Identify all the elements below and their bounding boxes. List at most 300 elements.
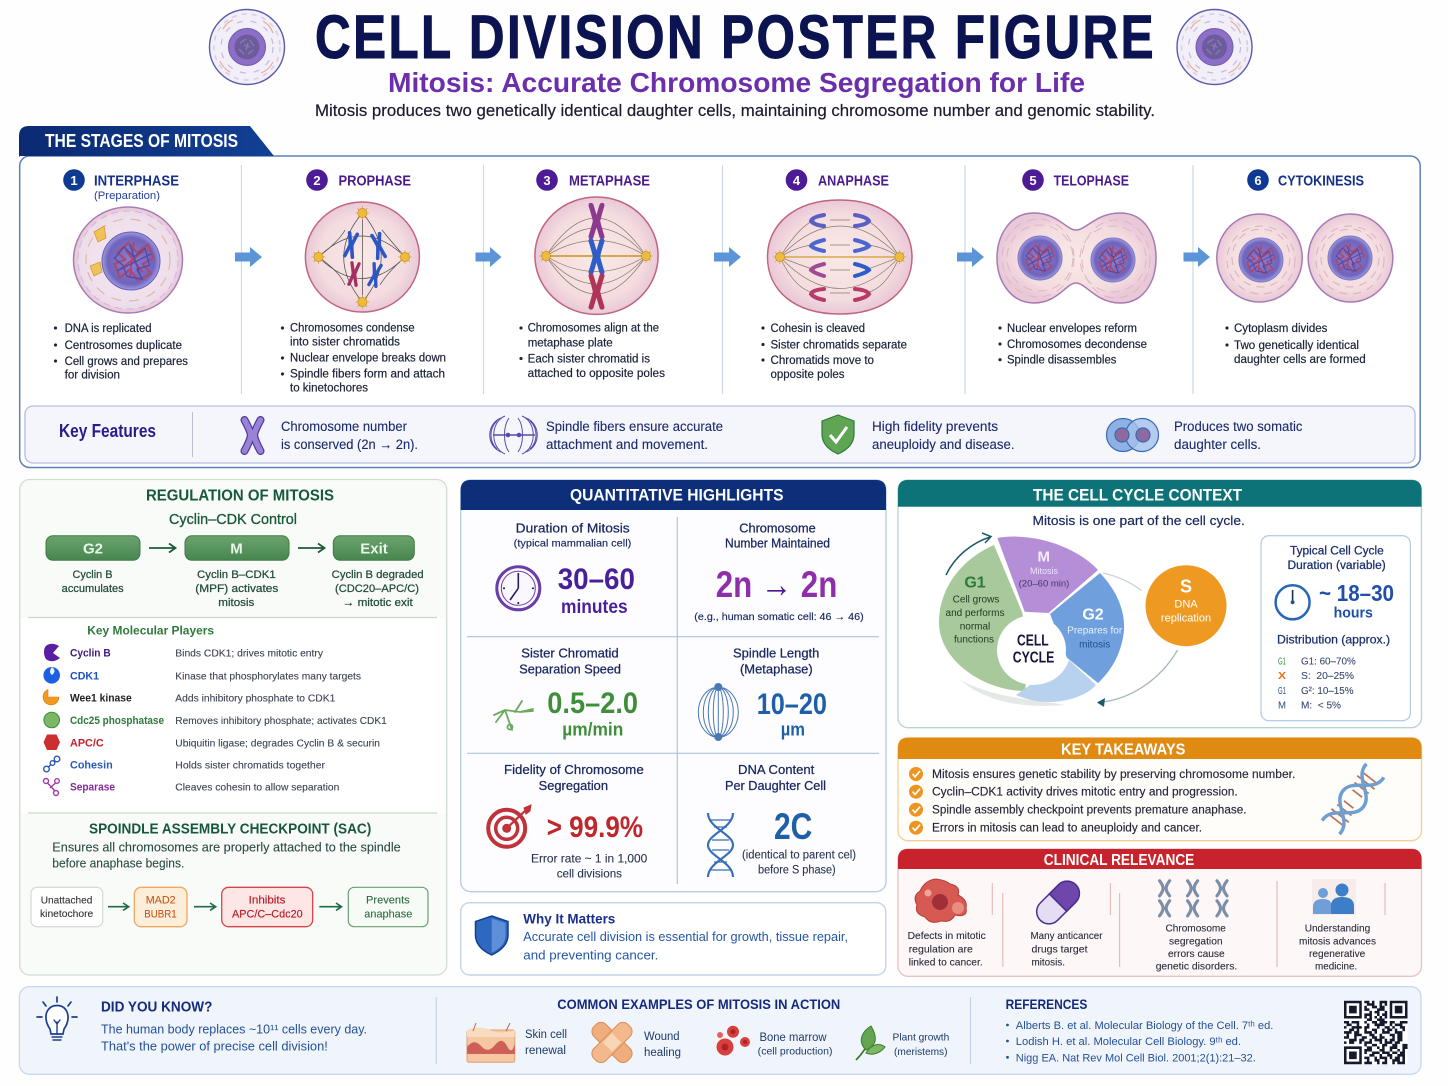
stat: spindle length: 10–20	[757, 688, 827, 721]
clinical item: cancer cell: linked to cancer.	[909, 956, 983, 968]
icon: Cyclin B	[44, 644, 60, 661]
bullet list: Centrosomes duplicate	[65, 340, 182, 352]
player descriptions: Adds inhibitory phosphate to CDK1	[175, 693, 335, 705]
bullet list: Chromosomes condense	[290, 323, 415, 335]
arrow: 3 to 4	[714, 247, 741, 267]
duration box: ~ 18–30	[1319, 580, 1394, 606]
example: plant growth: (meristems)	[894, 1046, 948, 1058]
key molecular players heading: Key Molecular Players	[87, 625, 214, 637]
takeaway text: Errors in mitosis can lead to aneuploidy and cancer.	[932, 823, 1202, 835]
wedge: G2: G2	[1082, 607, 1104, 624]
stat: duration of mitosis: 30–60	[558, 563, 635, 596]
wedge: M	[997, 537, 1098, 613]
number badge 1: 1	[70, 173, 78, 188]
illustration: prophase cell	[305, 202, 419, 312]
stat: DNA content per daughter cell: 2C	[774, 806, 812, 847]
bullet list: DNA is replicated	[65, 323, 152, 335]
section tab	[19, 126, 274, 157]
panel: quantitative highlights	[461, 480, 886, 892]
player descriptions	[175, 648, 387, 794]
icon: Cdc25 phosphatase	[44, 712, 60, 728]
panel: the stages of mitosis	[19, 126, 1420, 468]
clinical item: chromosomes: genetic disorders.	[1156, 961, 1237, 973]
arrow: G2 to M	[149, 544, 176, 552]
molecular players table	[43, 644, 387, 796]
clinical item: people: medicine.	[1315, 961, 1357, 973]
SAC box: MAD2 BUBR1: BUBR1	[144, 908, 177, 920]
did you know text: That's the power of precise cell division!	[101, 1039, 328, 1054]
feature text 4: daughter cells.	[1174, 437, 1261, 452]
flow: Exit pill	[333, 536, 414, 560]
SAC box: unattached kinetochore: Unattached	[41, 894, 93, 906]
duration box	[1261, 536, 1410, 721]
stat: duration of mitosis: (typical mammalian cell)	[514, 538, 631, 550]
header band	[461, 480, 886, 510]
bullet list: Two genetically identical	[1234, 340, 1359, 352]
bullet list	[54, 323, 188, 382]
duration box: hours	[1334, 605, 1373, 622]
stage 2: prophase	[281, 169, 446, 395]
SAC box: inhibits APC/C-Cdc20	[222, 887, 313, 927]
SAC heading: SPOINDLE ASSEMBLY CHECKPOINT (SAC)	[89, 821, 371, 837]
wedge: G1: and performs	[946, 608, 1004, 619]
bullet list: Each sister chromatid is	[528, 353, 650, 365]
player names: Cyclin B	[70, 648, 111, 660]
header band	[898, 480, 1422, 507]
references list: Lodish H. et al. Molecular Cell Biology. 9ᵗʰ ed.	[1016, 1036, 1241, 1048]
icon: DNA helix	[708, 813, 733, 877]
flow captions: → mitotic exit	[343, 597, 413, 609]
player names	[70, 648, 164, 794]
clinical item: capsule: mitosis.	[1032, 956, 1065, 968]
stage 1: interphase	[54, 169, 188, 382]
stat: DNA content per daughter cell: Per Daughter Cell	[725, 779, 826, 793]
footer panel	[19, 987, 1421, 1074]
clinical item: chromosomes: segregation	[1169, 935, 1223, 947]
illustration: metaphase cell	[535, 197, 658, 314]
number badge 3: 3	[543, 173, 551, 188]
distribution list: G1	[1278, 686, 1286, 697]
S phase circle: replication	[1161, 613, 1211, 625]
wedge: G1	[939, 545, 1030, 691]
flow captions: accumulates	[62, 583, 124, 595]
arrow: cycle top	[946, 533, 991, 575]
bullet list: Nuclear envelopes reform	[1007, 323, 1137, 335]
icon: Separase	[44, 778, 59, 796]
bullet list: Spindle fibers form and attach	[290, 369, 445, 381]
clinical item: capsule: drugs target	[1032, 943, 1088, 955]
subtitle: Mitosis: Accurate Chromosome Segregation for Life	[388, 67, 1085, 98]
stat: fidelity of chromosome segregation: cell divisions	[557, 867, 622, 881]
examples heading: COMMON EXAMPLES OF MITOSIS IN ACTION	[557, 996, 840, 1012]
bullet list: into sister chromatids	[290, 337, 400, 349]
bullet list: metaphase plate	[528, 337, 613, 349]
did you know text	[101, 1021, 367, 1054]
stat: duration of mitosis	[497, 520, 635, 618]
bullet list: Sister chromatids separate	[770, 339, 907, 351]
example: plant growth	[856, 1026, 949, 1060]
cell cycle wheel	[939, 537, 1124, 706]
stat: sister chromatid separation speed: Separation Speed	[519, 663, 621, 677]
number badge 5: 5	[1029, 173, 1037, 188]
stat: fidelity of chromosome segregation	[488, 763, 648, 881]
heading: THE CELL CYCLE CONTEXT	[1033, 487, 1242, 505]
distribution list: S: 20–25%	[1301, 671, 1354, 682]
distribution list: G1: 60–70%	[1301, 656, 1356, 668]
icon: spindle	[490, 416, 537, 454]
stat: spindle length	[698, 647, 827, 740]
section heading: THE STAGES OF MITOSIS	[45, 131, 238, 151]
flow: M pill	[185, 536, 289, 560]
stage name: TELOPHASE	[1054, 172, 1129, 190]
takeaway text: Mitosis ensures genetic stability by preserving chromosome number.	[932, 769, 1295, 781]
references heading: REFERENCES	[1006, 996, 1087, 1012]
references list	[1006, 1020, 1273, 1064]
stat: spindle length: µm	[781, 720, 805, 740]
stage 4: anaphase	[762, 169, 912, 381]
flow: M pill: M	[230, 540, 243, 558]
distribution list	[1278, 656, 1356, 712]
bullet list: Cytoplasm divides	[1234, 323, 1328, 335]
callout text: and preventing cancer.	[523, 947, 658, 962]
stage note: (Preparation)	[94, 190, 160, 202]
stat: fidelity of chromosome segregation: Segregation	[539, 779, 608, 793]
stat: spindle length: Spindle Length	[733, 647, 819, 661]
header band	[898, 738, 1422, 759]
SAC description: Ensures all chromosomes are properly attached to the spindle	[52, 840, 401, 855]
icon: two daughter cells	[1106, 418, 1158, 452]
player descriptions: Kinase that phosphorylates many targets	[175, 670, 361, 682]
illustration: two daughter cells	[1217, 214, 1393, 302]
distribution list: G1	[1278, 656, 1286, 668]
example: wound healing: healing	[644, 1047, 681, 1059]
icon: blue shield	[476, 916, 508, 955]
clinical item: cancer cell	[908, 879, 986, 968]
clinical item: people: mitosis advances	[1299, 935, 1376, 947]
intro sentence: Mitosis produces two genetically identical daughter cells, maintaining chromosome number and genomic stability.	[315, 101, 1155, 120]
number badge 6: 6	[1254, 173, 1262, 188]
arrow: M to S	[1103, 573, 1142, 590]
bullet list: to kinetochores	[290, 383, 368, 395]
stat: fidelity of chromosome segregation: Error rate ~ 1 in 1,000	[531, 851, 648, 865]
illustration: anaphase cell	[768, 200, 912, 314]
stage name: INTERPHASE	[94, 172, 179, 190]
stat: DNA content per daughter cell: (identical to parent cel)	[742, 849, 856, 861]
heading: KEY TAKEAWAYS	[1061, 741, 1185, 758]
takeaway checks	[909, 767, 923, 835]
wedge: G2	[1050, 573, 1124, 683]
arrow: M to Exit	[298, 544, 324, 552]
S phase circle: DNA	[1174, 598, 1198, 610]
panel: regulation of mitosis	[20, 480, 447, 975]
example: skin cell renewal	[467, 1023, 567, 1062]
bullet list	[1226, 323, 1366, 366]
hub: CYCLE	[1013, 649, 1054, 666]
stat: sister chromatid separation speed: µm/min	[562, 720, 623, 740]
number badge 4	[786, 169, 807, 191]
clinical item: cancer cell: regulation are	[909, 943, 973, 955]
feature text 1: is conserved (2n → 2n).	[281, 437, 418, 452]
icon: Wee1 kinase	[43, 690, 59, 705]
arrow: 4 to 5	[957, 247, 984, 267]
feature text 2	[546, 419, 723, 452]
stat: sister chromatid separation speed: 0.5–2.0	[547, 687, 638, 720]
SAC box: prevents anaphase: anaphase	[364, 908, 412, 920]
feature text 3: aneuploidy and disease.	[872, 437, 1014, 452]
feature text 2: Spindle fibers ensure accurate	[546, 419, 723, 434]
bullet list: Cell grows and prepares	[65, 356, 188, 368]
bullet list	[998, 323, 1147, 367]
wedge: light blue segment	[1016, 660, 1096, 702]
did you know heading: DID YOU KNOW?	[101, 1000, 213, 1016]
clinical item: chromosomes: Chromosome	[1166, 923, 1226, 935]
S phase circle	[1146, 565, 1226, 646]
clinical item: chromosomes	[1156, 881, 1237, 973]
player descriptions: Binds CDK1; drives mitotic entry	[175, 648, 324, 660]
SAC box: unattached kinetochore: kinetochore	[40, 908, 93, 920]
icon: target	[488, 805, 531, 847]
wedge: G2: Prepares for	[1067, 626, 1123, 637]
number badge 5	[1022, 169, 1044, 191]
bullet list	[281, 323, 446, 395]
arrow: 5 to 6	[1184, 247, 1210, 267]
bullet list: for division	[65, 370, 120, 382]
callout heading: Why It Matters	[523, 911, 615, 926]
arrow	[319, 903, 342, 910]
stat: DNA content per daughter cell: before S phase)	[758, 864, 836, 876]
heading: QUANTITATIVE HIGHLIGHTS	[570, 487, 784, 505]
bullet list	[520, 323, 665, 380]
icon: separating chromatid	[494, 701, 533, 730]
icon: clock	[497, 567, 540, 610]
wedge: G1: Cell grows	[953, 594, 999, 606]
icon: clock	[1276, 585, 1310, 619]
sub-heading: Cyclin–CDK Control	[169, 512, 297, 528]
takeaway text: Spindle assembly checkpoint prevents premature anaphase.	[932, 805, 1246, 817]
example: bone marrow: Bone marrow	[760, 1032, 827, 1044]
bullet list: Spindle disassembles	[1007, 355, 1117, 367]
arrow: 1 to 2	[235, 247, 262, 267]
flow: Exit pill: Exit	[360, 540, 388, 558]
player names: Cohesin	[70, 760, 113, 772]
flow: G2 pill	[46, 536, 140, 560]
bullet list: attached to opposite poles	[528, 368, 665, 380]
did you know text: The human body replaces ~10¹¹ cells every day.	[101, 1021, 367, 1036]
flow captions: Cyclin B–CDK1	[197, 569, 276, 581]
example: wound healing	[589, 1020, 681, 1065]
wedge: M: Mitosis	[1030, 566, 1058, 576]
SAC box: MAD2 BUBR1	[134, 887, 187, 927]
stage name: CYTOKINESIS	[1278, 172, 1364, 190]
icon: green shield	[822, 415, 854, 454]
stat: chromosome number maintained: 2n → 2n	[716, 564, 837, 605]
feature text 1: Chromosome number	[281, 419, 407, 434]
bullet list: Chromosomes align at the	[528, 323, 659, 335]
bullet list: Nuclear envelope breaks down	[290, 353, 446, 365]
stat: chromosome number maintained: Chromosome	[739, 521, 816, 535]
example: bone marrow	[716, 1026, 832, 1058]
SAC box: unattached kinetochore	[31, 887, 103, 927]
example: plant growth: Plant growth	[892, 1032, 949, 1044]
icon: QR code	[1344, 1001, 1408, 1064]
callout text	[523, 929, 848, 962]
number badge 4: 4	[793, 173, 801, 188]
feature text 3: High fidelity prevents	[872, 419, 998, 434]
illustration: telophase cell	[997, 213, 1156, 303]
icon: Cohesin	[44, 756, 60, 772]
player descriptions: Removes inhibitory phosphate; activates CDK1	[175, 715, 387, 727]
duration box: Typical Cell Cycle	[1290, 545, 1384, 557]
illustration: interphase cell	[74, 207, 182, 313]
stat: sister chromatid separation speed: Sister Chromatid	[521, 647, 619, 661]
stage 3: metaphase	[520, 169, 665, 380]
key features heading: Key Features	[59, 421, 156, 441]
flow captions: Cyclin B	[72, 569, 112, 581]
flow captions: (CDC20–APC/C)	[335, 583, 419, 595]
example: skin cell renewal: Skin cell	[525, 1029, 567, 1041]
icon: cell, header left	[210, 10, 284, 84]
SAC box: prevents anaphase: Prevents	[366, 894, 410, 906]
SAC description	[52, 840, 401, 871]
feature text 3	[872, 419, 1014, 452]
SAC box: MAD2 BUBR1: MAD2	[146, 894, 176, 906]
stat: fidelity of chromosome segregation: Fidelity of Chromosome	[504, 763, 644, 777]
duration box: Distribution (approx.)	[1277, 632, 1390, 646]
S phase circle: S	[1180, 576, 1192, 596]
references list: Nigg EA. Nat Rev Mol Cell Biol. 2001;2(1):21–32.	[1016, 1052, 1256, 1064]
wedge: M: (20–60 min)	[1019, 579, 1069, 590]
wedge: G1: G1	[964, 574, 986, 591]
arrow: S to G2	[1098, 650, 1178, 702]
stat: sister chromatid separation speed	[494, 647, 638, 740]
callout: why it matters	[461, 903, 886, 975]
stat: duration of mitosis: Duration of Mitosis	[516, 520, 630, 535]
arrow: 2 to 3	[476, 247, 502, 267]
wedge: G1: normal	[960, 622, 990, 632]
callout text: Accurate cell division is essential for growth, tissue repair,	[523, 929, 848, 944]
clinical item: people: regenerative	[1309, 948, 1365, 960]
panel: clinical relevance	[898, 849, 1422, 976]
feature text 4	[1174, 419, 1303, 452]
duration box: Duration (variable)	[1288, 560, 1386, 572]
header band	[898, 849, 1422, 869]
SAC box: inhibits APC/C-Cdc20: APC/C–Cdc20	[232, 908, 303, 920]
stage 6: cytokinesis	[1217, 169, 1393, 366]
stage 5: telophase	[997, 169, 1156, 367]
player names: Separase	[70, 782, 115, 794]
bullet list: opposite poles	[770, 369, 845, 381]
icon: chromosome	[244, 420, 260, 451]
flow: G2 pill: G2	[83, 540, 103, 558]
feature text 1	[281, 419, 418, 452]
clinical item: people	[1299, 879, 1376, 973]
number badge 1	[63, 169, 85, 191]
icon: light bulb	[37, 997, 77, 1040]
SAC box: prevents anaphase	[348, 887, 428, 927]
intro line: Mitosis is one part of the cell cycle.	[1032, 513, 1245, 528]
example: bone marrow: (cell production)	[758, 1046, 832, 1058]
stage name: METAPHASE	[569, 172, 650, 190]
bullet list: daughter cells are formed	[1234, 354, 1366, 366]
number badge 6	[1247, 169, 1269, 191]
clinical item: capsule	[1030, 876, 1103, 968]
stat: chromosome number maintained: (e.g., human somatic cell: 46 → 46)	[694, 611, 864, 623]
bullet list: Cohesin is cleaved	[770, 323, 865, 335]
player descriptions: Ubiquitin ligase; degrades Cyclin B & securin	[175, 737, 380, 749]
stage name: PROPHASE	[338, 172, 411, 190]
icon: DNA helix	[1321, 763, 1385, 835]
wedge: G2: mitosis	[1079, 639, 1110, 650]
references list: Alberts B. et al. Molecular Biology of the Cell. 7ᵗʰ ed.	[1016, 1020, 1273, 1032]
player descriptions: Holds sister chromatids together	[175, 760, 325, 772]
panel: key takeaways	[898, 738, 1422, 841]
player descriptions: Cleaves cohesin to allow separation	[175, 782, 339, 794]
clinical item: capsule: Many anticancer	[1030, 930, 1103, 942]
player names: Cdc25 phosphatase	[70, 715, 164, 727]
stat: fidelity of chromosome segregation: > 99.9%	[547, 811, 643, 844]
arrow	[194, 903, 216, 910]
distribution list: G²: 10–15%	[1301, 686, 1354, 697]
stat: DNA content per daughter cell	[708, 763, 856, 877]
distribution list: M	[1278, 700, 1286, 712]
flow captions: Cyclin B degraded	[332, 569, 424, 581]
bullet list: Chromosomes decondense	[1007, 339, 1147, 351]
distribution list: X	[1278, 671, 1286, 682]
takeaway text	[932, 769, 1295, 835]
feature text 4: Produces two somatic	[1174, 419, 1303, 434]
feature text 2: attachment and movement.	[546, 437, 708, 452]
flow captions: mitosis	[218, 597, 255, 609]
stat: DNA content per daughter cell: DNA Content	[738, 763, 815, 777]
key features bar	[25, 406, 1415, 463]
number badge 3	[536, 169, 558, 191]
number badge 2	[306, 169, 328, 191]
arrow	[108, 903, 129, 910]
flow captions	[62, 569, 424, 609]
SAC box: inhibits APC/C-Cdc20: Inhibits	[249, 894, 286, 906]
flow captions: (MPF) activates	[195, 583, 279, 595]
stat: duration of mitosis: minutes	[561, 597, 628, 618]
icon: CDK1	[43, 667, 60, 684]
distribution list: M: < 5%	[1301, 700, 1341, 712]
icon: spindle	[698, 684, 738, 740]
example: wound healing: Wound	[644, 1031, 680, 1043]
stat: spindle length: (Metaphase)	[740, 663, 813, 677]
player names: CDK1	[70, 670, 99, 682]
panel: the cell cycle context	[898, 480, 1422, 728]
bullet list	[762, 323, 907, 381]
hub: CELL	[1017, 633, 1049, 650]
icon: APC/C	[44, 734, 60, 750]
stage name: ANAPHASE	[818, 172, 889, 190]
wedge: G1: functions	[954, 634, 994, 646]
clinical item: people: Understanding	[1305, 923, 1370, 935]
number badge 2: 2	[313, 173, 321, 188]
stat: chromosome number maintained	[694, 521, 864, 623]
wedge: M: M	[1038, 549, 1050, 566]
player names: Wee1 kinase	[70, 693, 132, 705]
title: CELL DIVISION POSTER FIGURE	[315, 3, 1156, 71]
takeaway text: Cyclin–CDK1 activity drives mitotic entry and progression.	[932, 787, 1238, 799]
clinical item: cancer cell: Defects in mitotic	[908, 930, 986, 942]
clinical item: chromosomes: errors cause	[1168, 948, 1225, 960]
bullet list: Chromatids move to	[770, 355, 874, 367]
player names: APC/C	[70, 737, 104, 749]
heading: CLINICAL RELEVANCE	[1044, 852, 1194, 869]
heading: REGULATION OF MITOSIS	[146, 488, 334, 505]
icon: cell, header right	[1177, 10, 1252, 84]
SAC description: before anaphase begins.	[52, 856, 184, 871]
